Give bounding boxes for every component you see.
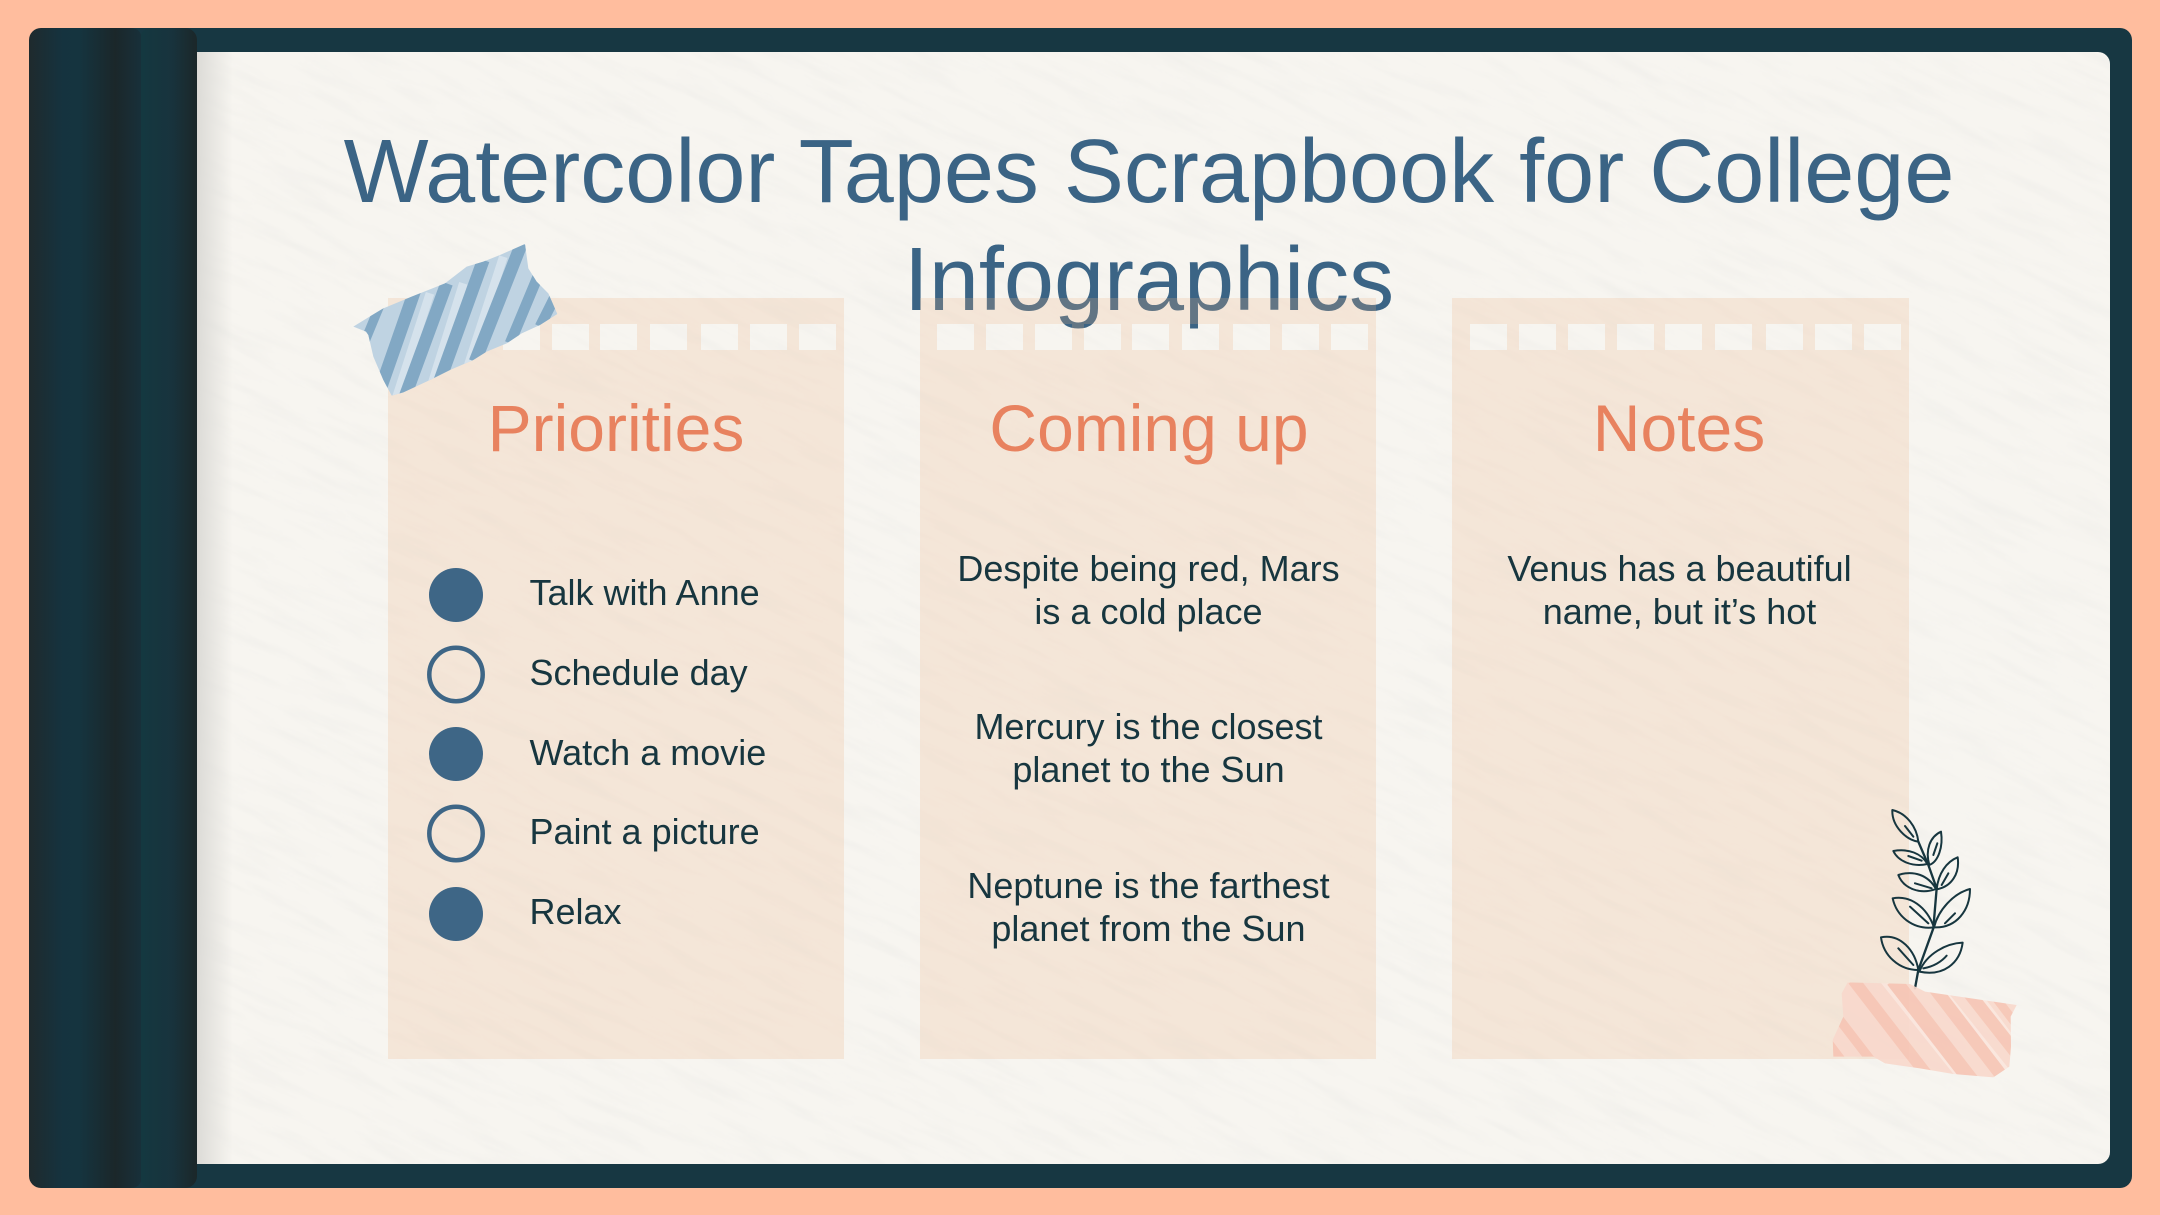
- washi tape: blue: [354, 244, 558, 396]
- text block: venus: Venus has a beautiful: [1507, 548, 1852, 589]
- heading: Coming up: [989, 391, 1309, 465]
- text block: neptune: Neptune is the farthest: [967, 865, 1330, 906]
- text block: mercury: Mercury is the closest: [974, 706, 1323, 747]
- note card: [1452, 298, 1909, 1059]
- note card: [920, 298, 1376, 1059]
- panel: coming up: [920, 298, 1376, 1059]
- icon: plant sprig: [1881, 810, 1970, 988]
- text block: mercury: planet to the Sun: [1012, 749, 1285, 790]
- title: [344, 122, 1954, 330]
- text block: venus: name, but it’s hot: [1543, 591, 1816, 632]
- text block: mercury: [974, 706, 1323, 790]
- note card: [388, 298, 844, 1059]
- title: Watercolor Tapes Scrapbook for College: [344, 122, 1954, 222]
- heading: Notes: [1593, 391, 1765, 465]
- checklist: [429, 568, 766, 941]
- panel: priorities: [388, 298, 844, 1059]
- text block: venus: [1507, 548, 1852, 632]
- text block: neptune: [967, 865, 1330, 949]
- text block: mars: [957, 548, 1340, 632]
- text block: mars: Despite being red, Mars: [957, 548, 1340, 589]
- checklist: Relax: [530, 891, 622, 932]
- panel: notes: [1452, 298, 1909, 1059]
- spine: inner fold: [141, 28, 197, 1188]
- text block: neptune: planet from the Sun: [991, 908, 1306, 949]
- washi tape: pink: [1832, 982, 2016, 1078]
- checklist: Watch a movie: [530, 732, 766, 773]
- checklist: Schedule day: [530, 652, 748, 693]
- title: Infographics: [904, 230, 1394, 330]
- text block: mars: is a cold place: [1034, 591, 1263, 632]
- checklist: Paint a picture: [530, 811, 760, 852]
- heading: Priorities: [488, 391, 744, 465]
- spine: outer fold: [29, 28, 141, 1188]
- checklist: Talk with Anne: [530, 572, 760, 613]
